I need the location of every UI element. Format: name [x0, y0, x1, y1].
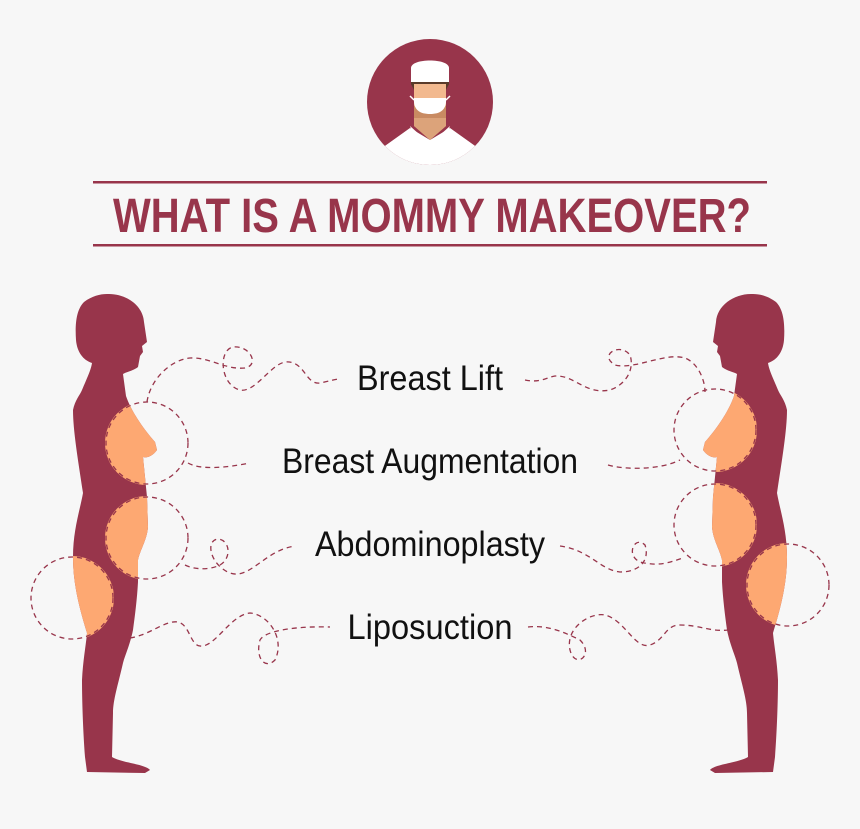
label: Liposuction: Liposuction [348, 608, 512, 647]
figure: left silhouette with treatment zones [30, 294, 189, 773]
label: Breast Lift: Breast Lift [357, 359, 503, 398]
icon: doctor avatar [367, 39, 493, 170]
label: Abdominoplasty: Abdominoplasty [315, 525, 545, 564]
dashed connectors [130, 347, 728, 664]
label: Breast Augmentation: Breast Augmentation [282, 442, 578, 481]
figure: right silhouette with treatment zones [673, 294, 830, 773]
title: WHAT IS A MOMMY MAKEOVER? [113, 190, 751, 243]
